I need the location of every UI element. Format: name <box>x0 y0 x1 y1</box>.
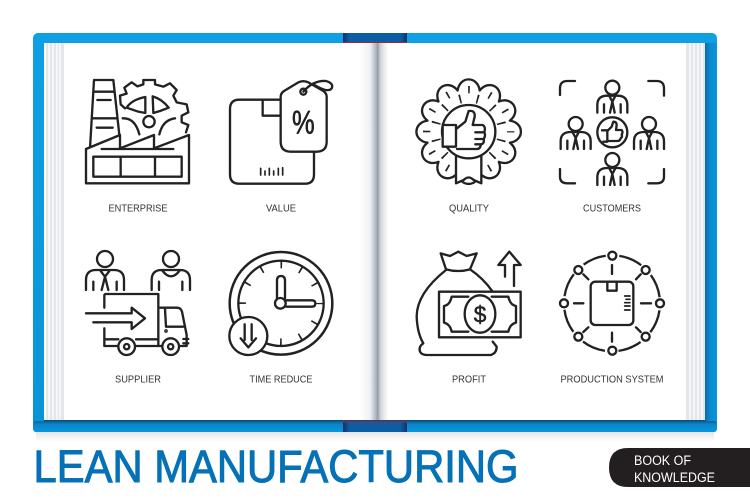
badge: book of knowledge: KNOWLEDGE <box>634 470 715 485</box>
badge: book of knowledge: BOOK OF <box>634 453 691 468</box>
icon: customers <box>560 81 664 185</box>
icon: production system <box>560 252 664 355</box>
icon: value <box>230 81 332 184</box>
spine bottom band <box>343 421 407 432</box>
icon: value: % <box>292 104 315 140</box>
label: enterprise: ENTERPRISE <box>108 204 168 214</box>
label: time reduce: TIME REDUCE <box>250 374 313 386</box>
left page <box>44 43 377 421</box>
icon: enterprise <box>86 80 189 183</box>
label: quality: QUALITY <box>449 204 489 214</box>
icon: quality rosette <box>416 79 521 184</box>
icon: profit money bag: $ <box>474 301 487 327</box>
label: customers: CUSTOMERS <box>583 204 641 214</box>
label: production system: PRODUCTION SYSTEM <box>560 374 664 386</box>
right page <box>377 43 705 421</box>
icon: supplier <box>86 251 190 355</box>
badge: book of knowledge <box>609 448 750 487</box>
label: value: VALUE <box>266 204 296 214</box>
icon: profit money bag <box>417 252 521 355</box>
blue cover <box>33 33 717 432</box>
label: profit: PROFIT <box>452 374 486 386</box>
spine top band <box>343 33 407 44</box>
icon: time reduce clock <box>229 252 332 355</box>
book <box>33 33 717 442</box>
title: LEAN MANUFACTURING <box>34 441 518 492</box>
label: supplier: SUPPLIER <box>115 374 161 386</box>
